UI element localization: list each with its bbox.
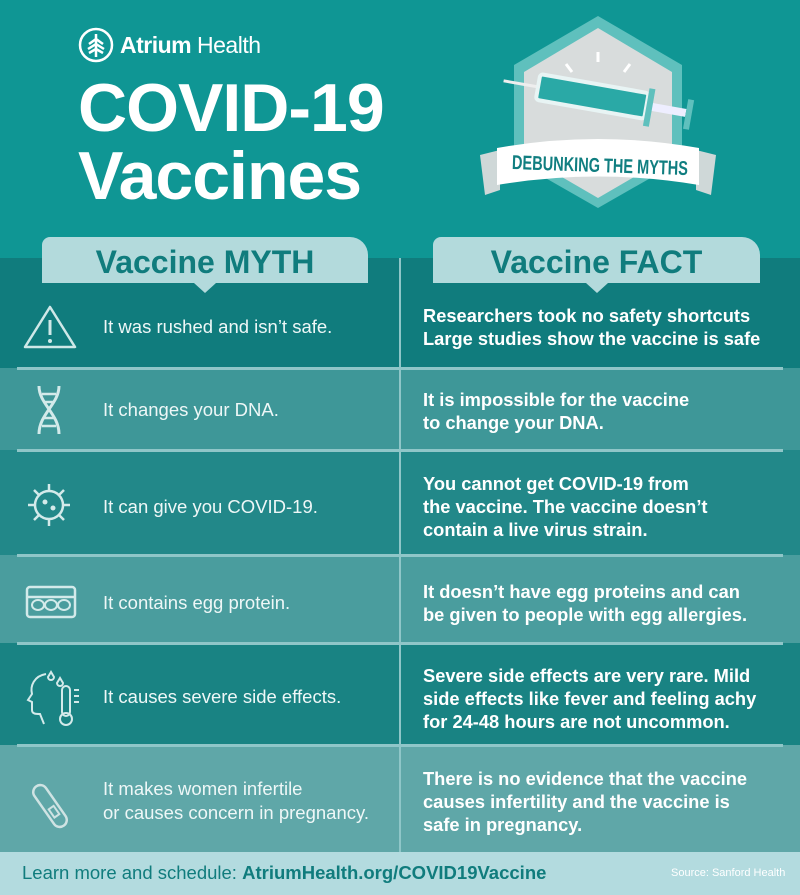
fact 1: Large studies show the vaccine is safe: [423, 328, 760, 349]
fact 1: [423, 305, 760, 349]
myth 3: It can give you COVID-19.: [103, 496, 318, 517]
logo: Atrium Health: [120, 32, 260, 58]
heading: Vaccine MYTH: [42, 237, 368, 293]
fact 2: to change your DNA.: [423, 412, 604, 433]
fact 5: [423, 665, 756, 732]
fact 5: Severe side effects are very rare. Mild: [423, 665, 750, 686]
fact 5: for 24-48 hours are not uncommon.: [423, 711, 730, 732]
myth 6: or causes concern in pregnancy.: [103, 802, 369, 823]
table rows background: [0, 258, 800, 368]
icon: egg carton: [26, 586, 76, 618]
icon: warning: [24, 306, 76, 348]
footer: Learn more and schedule: AtriumHealth.org/COVID19Vaccine: [22, 862, 546, 883]
myth 2: It changes your DNA.: [103, 399, 279, 420]
icon: fever: [26, 670, 79, 726]
badge: debunking the myths: [480, 16, 716, 208]
fact 3: [423, 473, 708, 540]
fact 4: [423, 581, 747, 625]
fact 6: causes infertility and the vaccine is: [423, 791, 730, 812]
fact 5: side effects like fever and feeling achy: [423, 688, 756, 709]
heading: Vaccine MYTH: Vaccine MYTH: [96, 244, 314, 280]
fact 3: You cannot get COVID-19 from: [423, 473, 689, 494]
title: COVID-19: [78, 70, 384, 146]
myth 5: It causes severe side effects.: [103, 686, 341, 707]
title: [78, 70, 384, 214]
fact 2: It is impossible for the vaccine: [423, 389, 689, 410]
footer: Source: Sanford Health: [671, 867, 785, 879]
title: Vaccines: [78, 138, 361, 214]
fact 6: safe in pregnancy.: [423, 814, 582, 835]
icon: DNA: [38, 386, 60, 434]
heading: Vaccine FACT: [433, 237, 760, 293]
fact 4: It doesn’t have egg proteins and can: [423, 581, 740, 602]
myth 1: It was rushed and isn’t safe.: [103, 316, 332, 337]
fact 1: Researchers took no safety shortcuts: [423, 305, 750, 326]
icon: virus: [28, 484, 70, 526]
footer: [0, 852, 800, 895]
fact 3: contain a live virus strain.: [423, 519, 648, 540]
fact 4: be given to people with egg allergies.: [423, 604, 747, 625]
fact 3: the vaccine. The vaccine doesn’t: [423, 496, 707, 517]
fact 6: There is no evidence that the vaccine: [423, 768, 747, 789]
icon: pregnancy test: [32, 784, 68, 828]
myth 6: [103, 778, 369, 823]
heading: Vaccine FACT: Vaccine FACT: [491, 244, 702, 280]
fact 2: [423, 389, 689, 433]
myth 6: It makes women infertile: [103, 778, 302, 799]
fact 6: [423, 768, 747, 835]
logo: [78, 28, 260, 62]
myth 4: It contains egg protein.: [103, 592, 290, 613]
